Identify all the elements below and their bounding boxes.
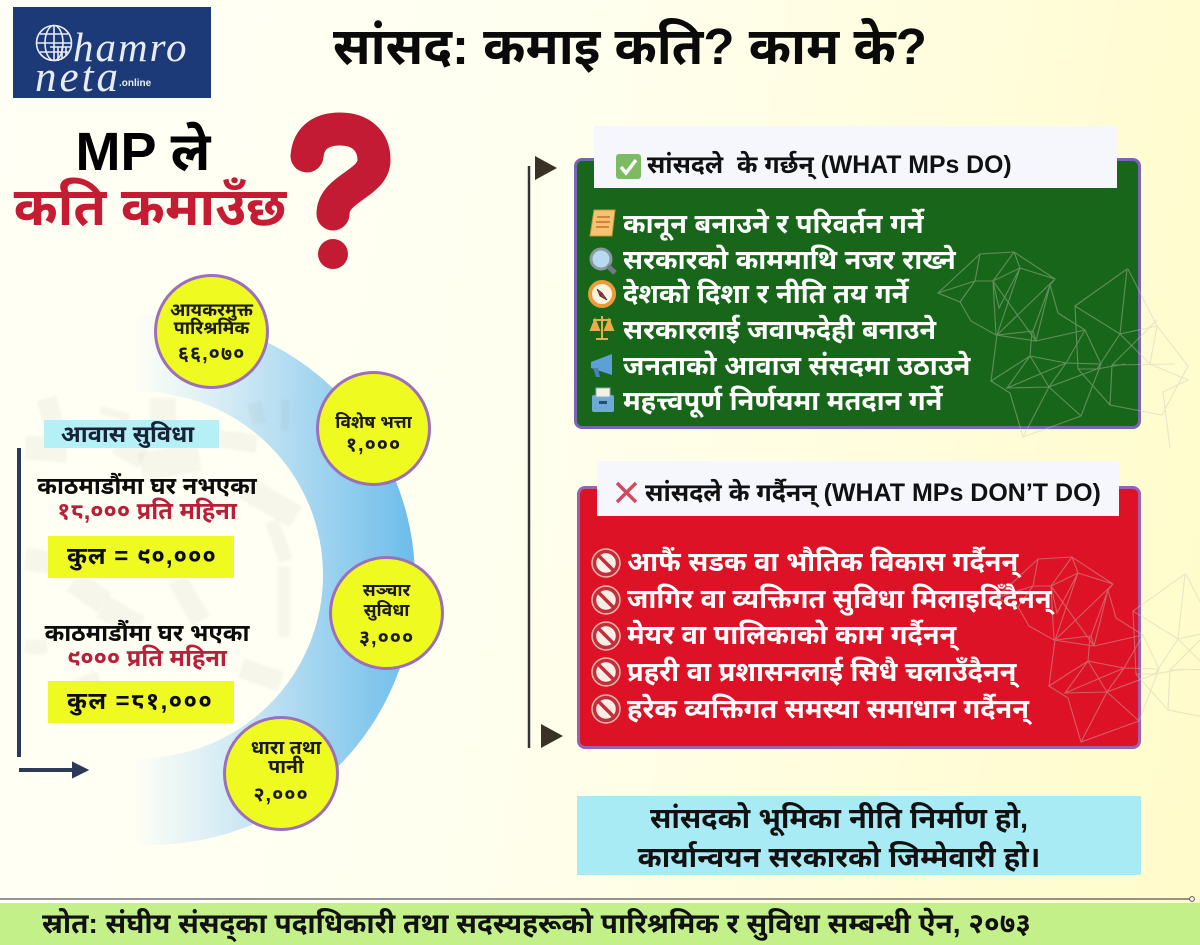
- bubble: water: [223, 716, 339, 831]
- arrow: left vertical bar and arrow: [17, 448, 90, 779]
- logo wordmark: [35, 24, 189, 98]
- item 6: महत्त्वपूर्ण निर्णयमा मतदान गर्ने: [623, 385, 942, 416]
- bubble: water: २,०००: [253, 784, 309, 806]
- item 5: जनताको आवाज संसदमा उठाउने: [623, 350, 970, 381]
- with-house total: [48, 681, 234, 723]
- item 2: जागिर वा व्यक्तिगत सुविधा मिलाइदिँदैनन्: [627, 583, 1052, 614]
- source footer: स्रोत: संघीय संसद्का पदाधिकारी तथा सदस्यहरूको पारिश्रमिक र सुविधा सम्बन्धी ऐन, २०७३: [42, 908, 1031, 939]
- footer divider: [0, 896, 1195, 902]
- heading: MP earnings: MP ले: [76, 122, 210, 182]
- with-house amount: ९००० प्रति महिना: [67, 646, 227, 672]
- item 5: हरेक व्यक्तिगत समस्या समाधान गर्दैनन्: [627, 693, 1029, 724]
- icon: check: [616, 154, 641, 179]
- with-house total: कुल =८१,०००: [67, 688, 213, 715]
- green panel header: सांसदले के गर्छन् (WHAT MPs DO): [647, 152, 1012, 179]
- faded banknotes background: [26, 398, 300, 690]
- bubble: water: धारा तथा: [251, 737, 321, 759]
- item 1: आफैं सडक वा भौतिक विकास गर्दैनन्: [627, 546, 1018, 577]
- housing section: [37, 420, 258, 723]
- green panel header: [594, 126, 1117, 188]
- bubble: communication: [329, 556, 444, 670]
- panel: what MPs don't do: [577, 486, 1141, 749]
- icon: globe: [36, 24, 72, 62]
- prohibited icons: [591, 548, 621, 724]
- key message box: सांसदको भूमिका नीति निर्माण हो,: [650, 803, 1028, 835]
- red panel header: [597, 461, 1119, 516]
- item 4: प्रहरी वा प्रशासनलाई सिधै चलाउँदैनन्: [627, 656, 1016, 687]
- item 1: कानून बनाउने र परिवर्तन गर्ने: [623, 208, 924, 239]
- bubble: special allowance: १,०००: [346, 434, 401, 456]
- arrow: right vertical line with arrowheads: [528, 156, 563, 748]
- green panel icons: [588, 210, 617, 412]
- bubble: tax free pay: [154, 274, 269, 389]
- logo wordmark: .online: [119, 78, 151, 89]
- bubble: tax free pay: आयकरमुक्त: [170, 300, 253, 320]
- no-house line: काठमाडौंमा घर नभएका: [37, 474, 257, 500]
- bubble: tax free pay: पारिश्रमिक: [174, 318, 249, 338]
- logo wordmark: hamro: [73, 24, 189, 70]
- housing heading: आवास सुविधा: [61, 421, 194, 447]
- no-house amount: १८,००० प्रति महिना: [57, 499, 237, 525]
- panel: what MPs do: [574, 158, 1141, 429]
- item 3: देशको दिशा र नीति तय गर्ने: [623, 278, 908, 309]
- item 3: मेयर वा पालिकाको काम गर्दैनन्: [627, 619, 956, 650]
- bubble: tax free pay: ६६,०७०: [178, 343, 245, 365]
- no-house total: कुल = ९०,०००: [67, 543, 217, 570]
- bubble: communication: सुविधा: [364, 600, 409, 620]
- bubble: special allowance: विशेष भत्ता: [335, 412, 412, 432]
- title: सांसद: कमाइ कति? काम के?: [333, 18, 927, 75]
- key message box: [577, 796, 1141, 875]
- logo: [13, 7, 211, 98]
- bubble: water: पानी: [268, 756, 304, 778]
- heading: MP earnings: [14, 122, 287, 237]
- icon: cross: [616, 482, 638, 504]
- bubble: communication: ३,०००: [359, 627, 414, 649]
- with-house line: काठमाडौंमा घर भएका: [45, 621, 249, 647]
- source footer: [0, 903, 1200, 945]
- no-house total: [48, 536, 234, 578]
- bubble: communication: सञ्चार: [363, 580, 410, 600]
- key message box: कार्यान्वयन सरकारको जिम्मेवारी हो।: [638, 842, 1040, 874]
- red panel header: सांसदले के गर्दैनन् (WHAT MPs DON’T DO): [645, 479, 1101, 507]
- icon: red question mark: [290, 112, 390, 269]
- item 2: सरकारको काममाथि नजर राख्ने: [623, 244, 956, 275]
- bubble: special allowance: [316, 371, 431, 486]
- heading: MP earnings: कति कमाउँछ: [14, 178, 286, 237]
- item 4: सरकारलाई जवाफदेही बनाउने: [623, 314, 936, 345]
